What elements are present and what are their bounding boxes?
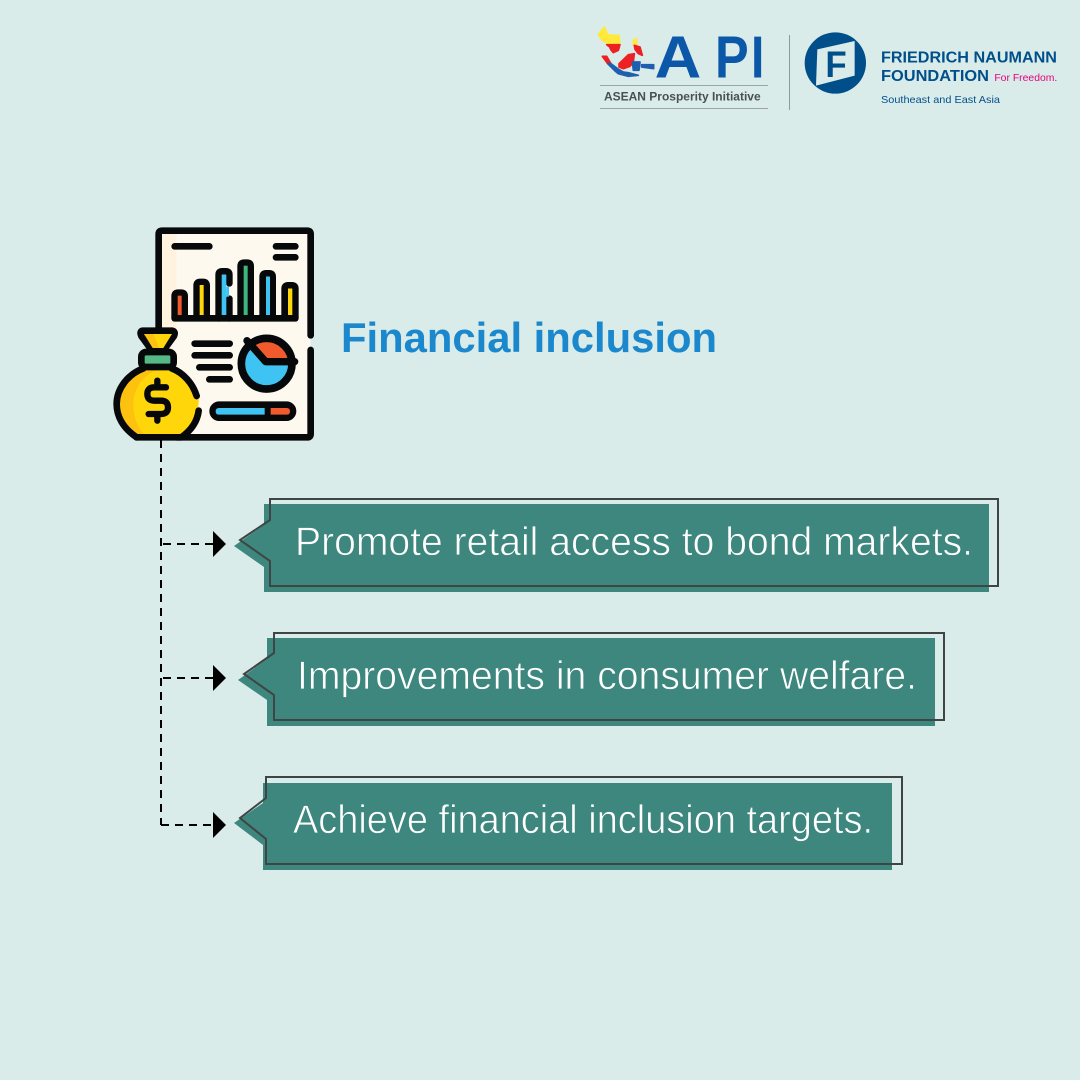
foundation name line 2: FOUNDATION bbox=[881, 68, 989, 85]
API wordmark: I bbox=[751, 23, 764, 90]
connector: dashed trunk and branches bbox=[161, 440, 214, 825]
API wordmark bbox=[655, 23, 764, 90]
callout 2: Improvements in consumer welfare. bbox=[297, 654, 917, 698]
callout 3: Achieve financial inclusion targets. bbox=[293, 798, 873, 842]
logo: Friedrich Naumann Foundation bbox=[805, 32, 1057, 106]
progress bar bbox=[213, 405, 293, 418]
rule below tagline bbox=[600, 107, 768, 110]
foundation name line 1: FRIEDRICH NAUMANN bbox=[881, 50, 1057, 67]
heading: Financial inclusion bbox=[341, 314, 717, 361]
tagline: ASEAN Prosperity Initiative bbox=[604, 91, 761, 104]
callout 3 bbox=[234, 777, 902, 870]
pie chart bbox=[241, 337, 295, 389]
arrow 1 bbox=[213, 531, 226, 557]
region: Southeast and East Asia bbox=[881, 95, 1000, 106]
API wordmark: A bbox=[655, 23, 701, 90]
arrow 2 bbox=[213, 665, 226, 691]
icon: report with money bag bbox=[117, 231, 311, 437]
icon: F circle: F bbox=[825, 44, 847, 85]
callout 2 bbox=[238, 633, 944, 726]
text lines bbox=[195, 344, 230, 379]
arrow 3 bbox=[213, 812, 226, 838]
logo divider bbox=[789, 35, 790, 110]
API wordmark: P bbox=[715, 23, 749, 90]
icon: F circle bbox=[805, 32, 866, 94]
callout 1 bbox=[234, 499, 998, 592]
slogan: For Freedom. bbox=[994, 73, 1057, 84]
rule above tagline bbox=[600, 84, 768, 87]
callout 1: Promote retail access to bond markets. bbox=[295, 520, 973, 564]
bar chart bbox=[175, 263, 295, 318]
report page bbox=[159, 231, 311, 437]
money bag bbox=[117, 331, 199, 437]
icon: Southeast Asia map bbox=[598, 27, 654, 76]
logo: ASEAN Prosperity Initiative bbox=[598, 23, 768, 109]
